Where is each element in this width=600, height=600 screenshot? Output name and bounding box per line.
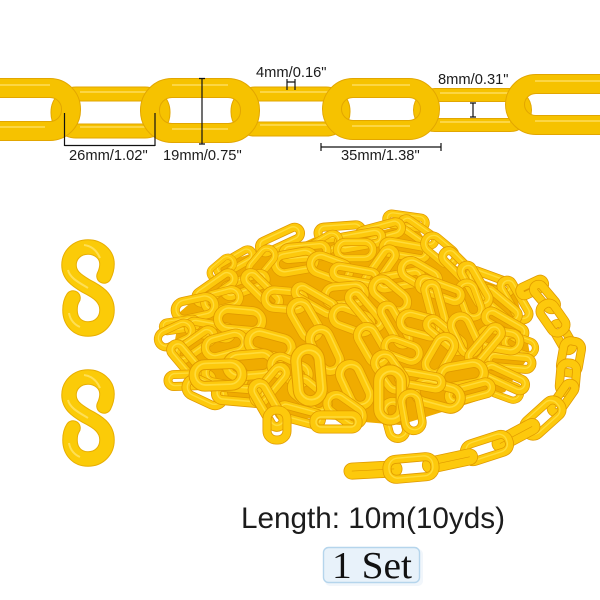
chain link: small F <box>420 93 525 125</box>
chain link: large E <box>332 85 430 130</box>
front bottom link <box>267 410 287 440</box>
chain link: large A <box>0 85 71 131</box>
pile base <box>175 228 530 425</box>
chain link: large G <box>515 81 600 125</box>
dimension: 35mm: 35mm/1.38" <box>341 148 420 164</box>
dimension: 8mm <box>438 72 509 117</box>
chain close-up with dimensions <box>0 65 600 164</box>
icon: S hook top <box>68 245 107 329</box>
chain link: large C <box>150 85 250 133</box>
dimension: 4mm: 4mm/0.16" <box>256 65 327 81</box>
dimension: 4mm <box>256 65 327 90</box>
trailing links <box>519 278 546 297</box>
dimension: 19mm: 19mm/0.75" <box>163 148 242 164</box>
badge: 1 Set: 1 Set <box>332 545 412 587</box>
dimension: 35mm <box>321 143 441 164</box>
dimension: 8mm: 8mm/0.31" <box>438 72 509 88</box>
front vertical link <box>295 348 324 402</box>
icon: S hook bottom <box>68 375 107 459</box>
front flat link <box>314 415 358 429</box>
trailing chain <box>348 278 583 480</box>
length label: Length: 10m(10yds) <box>241 502 505 535</box>
front slanted link <box>250 380 287 429</box>
dimension: 19mm <box>163 78 242 164</box>
dimension: 26mm <box>64 113 155 164</box>
chain link: small D <box>238 92 343 129</box>
chain link: small B <box>58 92 163 131</box>
coiled chain pile <box>155 212 538 441</box>
dimension: 26mm: 26mm/1.02" <box>69 148 148 164</box>
